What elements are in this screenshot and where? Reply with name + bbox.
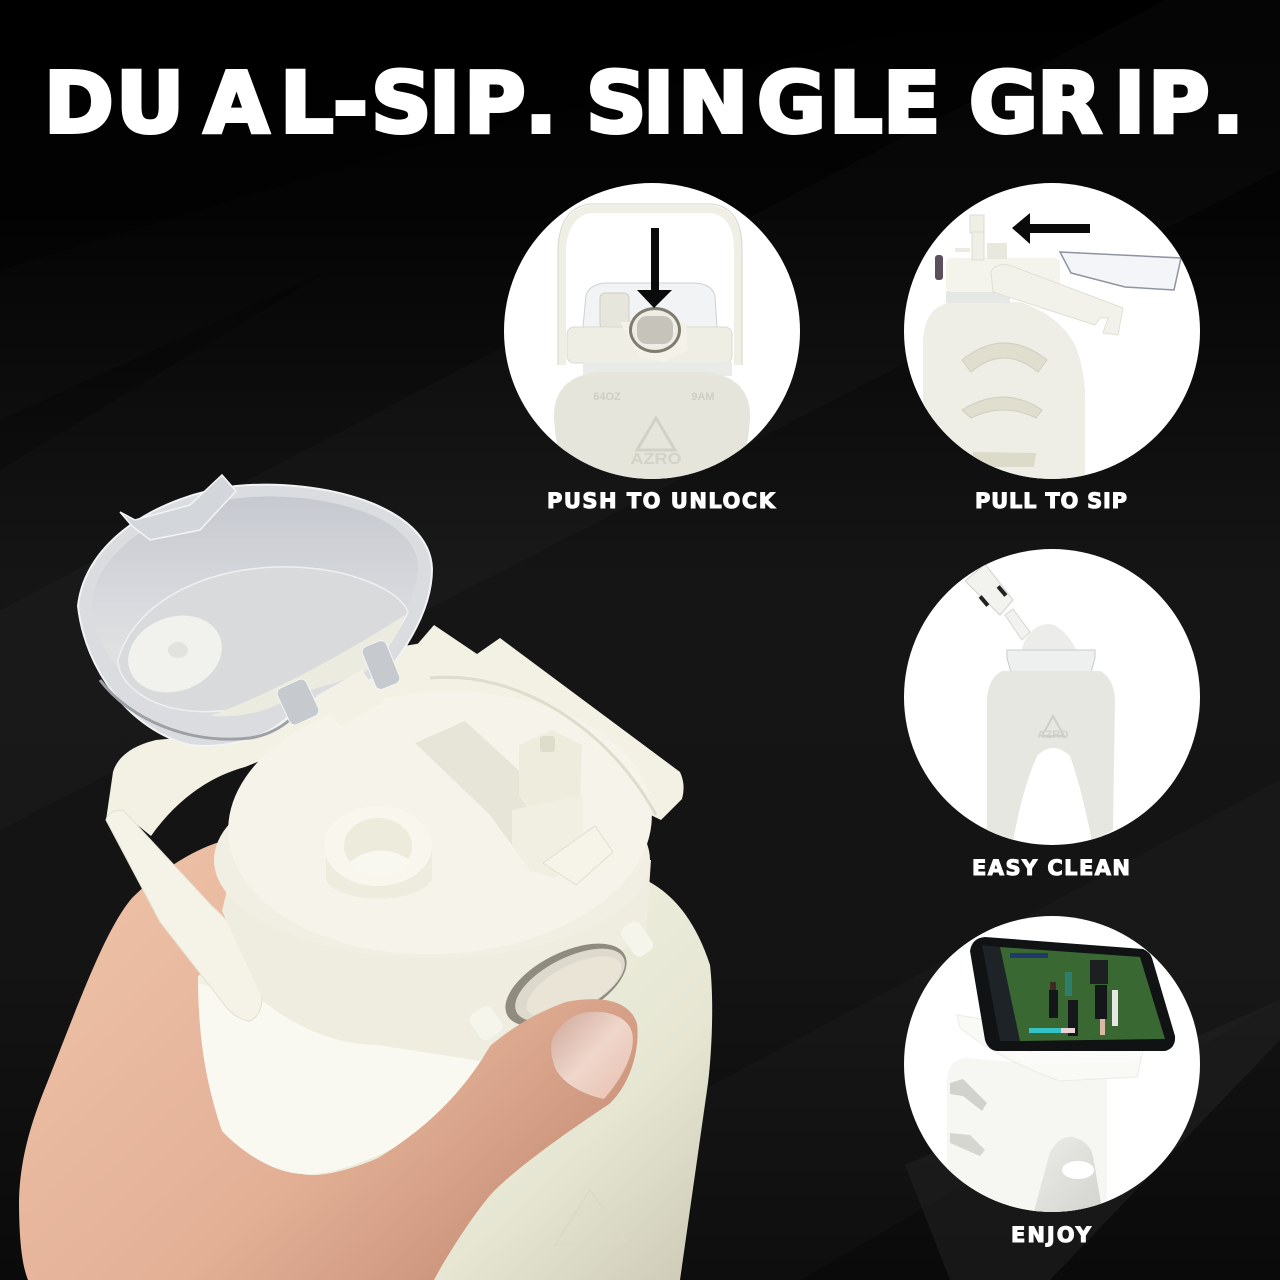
white band beneath collar bbox=[190, 981, 491, 1174]
thumb tip over button bbox=[450, 999, 638, 1190]
photo: hand holding bottle with open lid bbox=[19, 475, 712, 1280]
thumb nail bbox=[551, 1012, 633, 1099]
mouth tube bbox=[324, 806, 432, 899]
lid top disc bbox=[221, 681, 659, 965]
label: easy clean: EASY CLEAN bbox=[972, 856, 1130, 880]
panel: push to unlock bbox=[504, 183, 800, 480]
embossed bottle logo bbox=[555, 1190, 625, 1245]
lid hinge bbox=[316, 670, 384, 726]
carry handle bbox=[106, 625, 684, 836]
panel: pull to sip bbox=[904, 183, 1200, 480]
unlock button bbox=[467, 919, 656, 1043]
lid collar bbox=[222, 860, 651, 1061]
label: enjoy: ENJOY bbox=[1011, 1223, 1092, 1247]
panel: push to unlock: AZRO bbox=[630, 451, 682, 468]
bottle body bbox=[188, 880, 712, 1280]
label: push to unlock: PUSH TO UNLOCK bbox=[547, 489, 776, 513]
title: DUAL-SIP. SINGLE GRIP. bbox=[44, 54, 1244, 152]
handle left pad bbox=[106, 810, 262, 1021]
panel: enjoy bbox=[904, 916, 1200, 1215]
clear flip lid bbox=[78, 475, 432, 746]
lid rim arcs bbox=[430, 677, 656, 815]
hinge backing bbox=[270, 640, 480, 750]
phone bbox=[970, 937, 1175, 1051]
panel: push to unlock: 9AM bbox=[691, 391, 715, 403]
hand and thumb bbox=[19, 839, 638, 1280]
arrow: pull left bbox=[1012, 213, 1090, 244]
straw post bbox=[512, 730, 613, 885]
panel: easy clean bbox=[904, 549, 1200, 845]
panel: push to unlock: 64OZ bbox=[593, 391, 621, 403]
label: pull to sip: PULL TO SIP bbox=[975, 489, 1127, 513]
spout recess bbox=[415, 721, 540, 874]
arrow: push down bbox=[637, 228, 672, 308]
panel: easy clean: AZRO bbox=[1037, 729, 1069, 741]
lid lower step bbox=[214, 762, 650, 958]
